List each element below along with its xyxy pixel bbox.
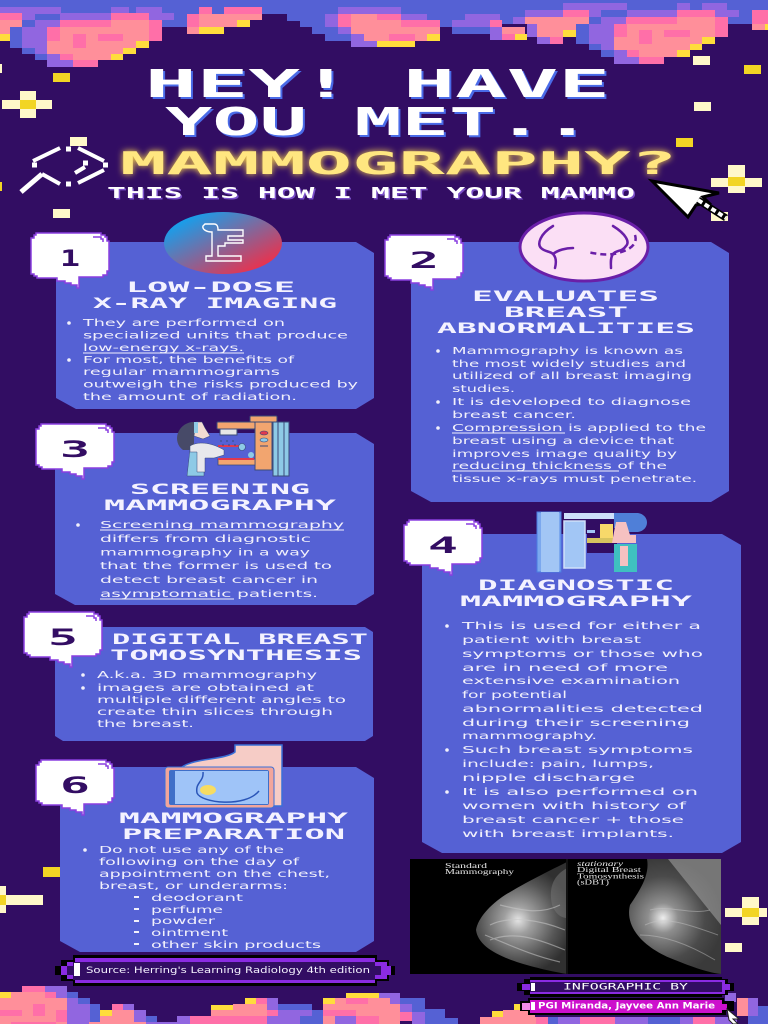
panel 1: low-dose x-ray imaging: the amount of radiation. bbox=[83, 392, 297, 403]
bottom pixel heart border bbox=[0, 986, 768, 1024]
title: hey have you met: YOU MET.. bbox=[165, 100, 591, 144]
panel 6: mammography preparation: other skin products bbox=[151, 940, 321, 951]
icon: breast in compression plate bbox=[165, 745, 282, 808]
panel 2: evaluates breast abnormalities: the most widely studies and bbox=[452, 359, 686, 370]
title: hey have you met: YOU MET.. bbox=[167, 102, 593, 146]
panel 6: mammography preparation bbox=[60, 745, 374, 952]
title: hey have you met: HEY! HAVE bbox=[147, 64, 612, 108]
panel 5: digital breast tomosynthesis bbox=[55, 627, 373, 741]
panel 4: diagnostic mammography: MAMMOGRAPHY bbox=[460, 594, 693, 610]
panel 3: screening mammography: MAMMOGRAPHY bbox=[104, 498, 337, 514]
speech bubble 5 bbox=[24, 612, 102, 667]
credit banner: author name: PGI Miranda, Jayvee Ann Marie bbox=[538, 1002, 715, 1012]
panel 2: evaluates breast abnormalities: tissue x-rays must penetrate. bbox=[452, 474, 697, 485]
heading: mammography: MAMMOGRAPHY? bbox=[120, 146, 677, 182]
icon: small cursor bbox=[727, 1009, 739, 1024]
panel 1: low-dose x-ray imaging: specialized units that produce bbox=[83, 330, 348, 342]
panel 2: evaluates breast abnormalities: Mammography is known as bbox=[452, 346, 683, 357]
magnifier icon bbox=[21, 148, 108, 192]
panel 1: low-dose x-ray imaging: X-RAY IMAGING bbox=[93, 296, 337, 312]
panel 2: evaluates breast abnormalities: EVALUATES bbox=[472, 289, 659, 305]
panel 3: screening mammography: that the former is used to bbox=[100, 561, 332, 572]
panel 4: diagnostic mammography: It is also performed on bbox=[462, 787, 698, 798]
panel 4: diagnostic mammography: with breast implants. bbox=[462, 829, 674, 840]
panel 3: screening mammography: differs from diagnostic bbox=[100, 534, 311, 545]
panel 5: digital breast tomosynthesis: DIGITAL BREAST bbox=[112, 632, 368, 648]
heading: mammography: MAMMOGRAPHY? bbox=[120, 146, 677, 182]
panel 1: low-dose x-ray imaging bbox=[56, 212, 374, 409]
speech bubble 5: 5 bbox=[48, 626, 78, 651]
panel 6: mammography preparation: PREPARATION bbox=[122, 827, 345, 843]
panel 2: evaluates breast abnormalities: utilized of all breast imaging bbox=[452, 371, 692, 382]
mammogram comparison image: Mammography bbox=[445, 867, 514, 876]
panel 4: diagnostic mammography: extensive examination bbox=[462, 676, 680, 687]
speech bubble 6: 6 bbox=[60, 774, 90, 799]
speech bubble 2 bbox=[385, 235, 463, 290]
panel 2: evaluates breast abnormalities: breast cancer. bbox=[452, 410, 576, 421]
mammogram comparison image: stationary bbox=[577, 859, 624, 868]
panel 4: diagnostic mammography: abnormalities detected bbox=[462, 704, 703, 715]
panel 4: diagnostic mammography: are in need of more bbox=[462, 663, 668, 674]
credit banner: infographic by bbox=[517, 977, 734, 997]
panel 4: diagnostic mammography: women with history of bbox=[462, 801, 687, 812]
panel 6: mammography preparation: ointment bbox=[151, 928, 228, 939]
speech bubble 1 bbox=[31, 233, 109, 288]
subtitle bbox=[107, 184, 636, 204]
credit banner: infographic by: INFOGRAPHIC BY bbox=[563, 982, 688, 992]
speech bubble 1: 1 bbox=[60, 247, 80, 272]
panel 4: diagnostic mammography: symptoms or those who bbox=[462, 649, 703, 660]
panel 4: diagnostic mammography: DIAGNOSTIC bbox=[478, 578, 674, 594]
top pixel heart border bbox=[0, 0, 768, 67]
panel 2: evaluates breast abnormalities: It is developed to diagnose bbox=[452, 397, 691, 408]
speech bubble 2: 2 bbox=[409, 249, 439, 274]
icon: breast outline bbox=[520, 213, 648, 281]
icon: patient at diagnostic machine bbox=[537, 512, 647, 572]
panel 6: mammography preparation: MAMMOGRAPHY bbox=[119, 811, 349, 827]
icon: mammography unit bbox=[164, 212, 282, 274]
panel 6: mammography preparation: appointment on the chest, bbox=[99, 869, 330, 880]
speech bubble 6 bbox=[36, 760, 114, 815]
panel 6: mammography preparation: powder bbox=[151, 916, 217, 927]
subtitle: THIS IS HOW I MET YOUR MAMMO bbox=[108, 186, 636, 204]
panel 5: digital breast tomosynthesis: multiple different angles to bbox=[97, 695, 346, 706]
panel 2: evaluates breast abnormalities: Compression is applied to the bbox=[452, 423, 706, 434]
panel 1: low-dose x-ray imaging: LOW-DOSE bbox=[126, 280, 295, 296]
source banner bbox=[55, 955, 395, 986]
panel 4: diagnostic mammography bbox=[422, 512, 741, 853]
speech bubble 3 bbox=[36, 424, 114, 479]
panel 4: diagnostic mammography: include: pain, lumps, bbox=[462, 759, 654, 770]
panel 4: diagnostic mammography: Such breast symptoms bbox=[462, 745, 693, 756]
speech bubble 4: 4 bbox=[428, 534, 458, 559]
panel 1: low-dose x-ray imaging: low-energy x-rays. bbox=[83, 343, 244, 354]
icon: patient at machine bbox=[177, 416, 289, 476]
panel 3: screening mammography: detect breast cancer in bbox=[100, 575, 318, 586]
panel 5: digital breast tomosynthesis: the breast. bbox=[97, 719, 194, 730]
panel 3: screening mammography: asymptomatic patients. bbox=[100, 589, 318, 600]
panel 1: low-dose x-ray imaging: For most, the benefits of bbox=[83, 355, 295, 366]
panel 2: evaluates breast abnormalities: ABNORMALITIES bbox=[437, 321, 695, 337]
panel 4: diagnostic mammography: breast cancer + those bbox=[462, 815, 684, 826]
speech bubble 3: 3 bbox=[60, 438, 90, 463]
panel 4: diagnostic mammography: during their screening bbox=[462, 718, 690, 729]
panel 1: low-dose x-ray imaging: They are performed on bbox=[81, 318, 285, 329]
subtitle: THIS IS HOW I MET YOUR MAMMO bbox=[107, 184, 635, 202]
panel 4: diagnostic mammography: patient with breast bbox=[462, 635, 641, 646]
panel 6: mammography preparation: Do not use any of the bbox=[99, 845, 284, 856]
panel 3: screening mammography: SCREENING bbox=[130, 482, 310, 498]
panel 4: diagnostic mammography: This is used for either a bbox=[460, 621, 701, 632]
panel 3: screening mammography bbox=[55, 416, 374, 605]
panel 6: mammography preparation: perfume bbox=[151, 905, 223, 916]
icon: cursor bbox=[652, 181, 726, 218]
panel 2: evaluates breast abnormalities: breast using a device that bbox=[452, 436, 674, 447]
panel 1: low-dose x-ray imaging: regular mammograms bbox=[83, 367, 280, 378]
speech bubble 4 bbox=[404, 520, 482, 575]
title: hey have you met bbox=[145, 62, 612, 146]
panel 3: screening mammography: Screening mammography bbox=[100, 520, 344, 531]
panel 2: evaluates breast abnormalities: BREAST bbox=[504, 305, 628, 321]
panel 2: evaluates breast abnormalities: improves image quality by bbox=[452, 449, 677, 460]
panel 2: evaluates breast abnormalities bbox=[411, 213, 729, 502]
panel 5: digital breast tomosynthesis: create thin slices through bbox=[97, 707, 333, 718]
panel 5: digital breast tomosynthesis: TOMOSYNTHESIS bbox=[110, 648, 362, 664]
panel 6: mammography preparation: deodorant bbox=[151, 893, 243, 904]
panel 5: digital breast tomosynthesis: A.k.a. 3D mammography bbox=[97, 670, 317, 681]
panel 1: low-dose x-ray imaging: outweigh the risks produced by bbox=[83, 380, 358, 390]
panel 4: diagnostic mammography: mammography. bbox=[462, 731, 597, 742]
panel 3: screening mammography: mammography in a way bbox=[100, 548, 310, 558]
panel 6: mammography preparation: following on the day of bbox=[99, 857, 300, 868]
panel 4: diagnostic mammography: nipple discharge bbox=[462, 773, 635, 784]
panel 5: digital breast tomosynthesis: images are obtained at bbox=[97, 683, 314, 694]
source banner: Source: Herring's Learning Radiology 4th edition bbox=[86, 966, 370, 976]
heading: mammography bbox=[120, 146, 677, 182]
title: hey have you met: HEY! HAVE bbox=[145, 62, 610, 106]
mammogram comparison image: Digital Breast bbox=[577, 865, 642, 874]
panel 2: evaluates breast abnormalities: studies. bbox=[452, 384, 515, 395]
panel 2: evaluates breast abnormalities: reducing thickness of the bbox=[452, 461, 667, 472]
mammogram comparison image: Tomosynthesis bbox=[577, 872, 644, 880]
panel 4: diagnostic mammography: for potential bbox=[462, 690, 567, 701]
credit banner: author name bbox=[520, 998, 734, 1015]
panel 6: mammography preparation: breast, or underarms: bbox=[99, 881, 288, 892]
mammogram comparison image bbox=[410, 859, 721, 974]
mammogram comparison image: Standard bbox=[445, 861, 487, 870]
mammogram comparison image: (sDBT) bbox=[577, 878, 610, 886]
